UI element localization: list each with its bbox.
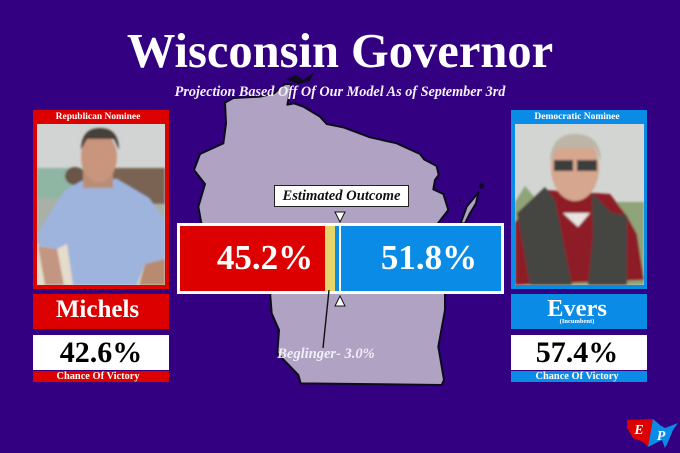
marker triangle: bottom — [334, 295, 346, 306]
estimated outcome line — [339, 226, 341, 291]
victory chance: 57.4%: 57.4% — [536, 336, 618, 369]
bar: Michels 45.2%: 45.2% — [217, 238, 313, 277]
estimated outcome label: Estimated Outcome — [283, 188, 400, 204]
victory chance: 57.4% — [511, 335, 647, 370]
marker triangle: top — [334, 212, 346, 223]
nominee label: Democratic Nominee — [534, 112, 620, 122]
name: Michels: Michels — [56, 296, 139, 323]
label: chance of victory — [33, 371, 169, 382]
leader line — [322, 290, 330, 348]
projection bar — [177, 223, 504, 294]
subtitle: Projection Based Off Of Our Model As of September 3rd — [175, 84, 505, 100]
name: Evers — [511, 294, 647, 329]
nominee label — [33, 110, 169, 289]
victory chance: 42.6%: 42.6% — [60, 336, 142, 369]
photo: Evers — [515, 124, 644, 285]
estimated outcome label — [274, 185, 409, 207]
panel: Democratic candidate — [511, 110, 647, 382]
nominee label: Republican Nominee — [56, 112, 140, 122]
name: Michels — [33, 294, 169, 329]
bar: Evers 51.8%: 51.8% — [381, 238, 477, 277]
name: Evers: Evers — [547, 295, 607, 322]
logo — [627, 419, 678, 448]
victory chance: 42.6% — [33, 335, 169, 370]
bar: Michels 45.2% — [180, 226, 325, 291]
label: chance of victory: Chance Of Victory — [535, 371, 619, 382]
label: chance of victory: Chance Of Victory — [56, 371, 140, 382]
logo: E — [633, 423, 644, 438]
label: chance of victory — [511, 371, 647, 382]
title: Wisconsin Governor — [127, 25, 553, 78]
photo: Michels — [37, 124, 165, 285]
bar: Beglinger share — [325, 226, 335, 291]
bar: Evers 51.8% — [335, 226, 501, 291]
label: Beglinger: Beglinger- 3.0% — [277, 346, 375, 362]
panel: Republican candidate — [33, 110, 169, 382]
logo: P — [657, 429, 666, 444]
incumbent note: (Incumbent) — [560, 318, 594, 325]
nominee label — [511, 110, 647, 289]
